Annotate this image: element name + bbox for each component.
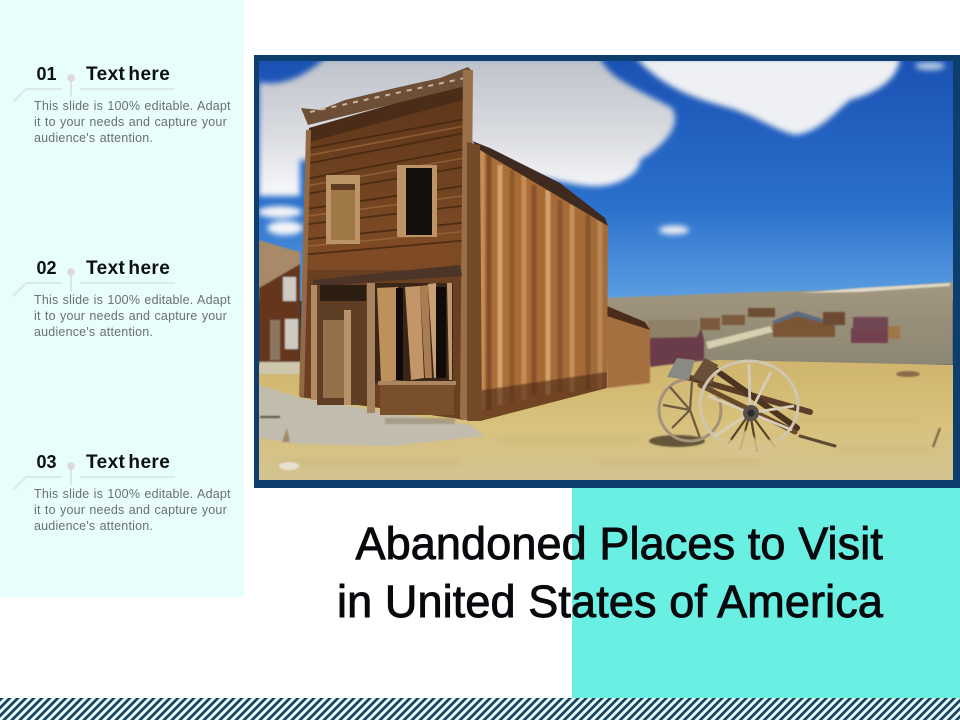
striped footer band bbox=[0, 698, 960, 720]
wagon bed bbox=[687, 366, 835, 446]
list item 02: 02 bbox=[36, 258, 57, 278]
back wheel bbox=[659, 379, 721, 441]
list item 01: This slide is 100% editable. Adapt bbox=[34, 99, 231, 113]
list item 02: audience's attention. bbox=[34, 325, 153, 339]
side wall bbox=[480, 150, 608, 420]
upper left shuttered window bbox=[331, 190, 355, 240]
list item 01: it to your needs and capture your bbox=[34, 115, 227, 129]
list item 03: audience's attention. bbox=[34, 519, 153, 533]
debris bbox=[260, 371, 940, 470]
wagon with wheels bbox=[649, 358, 835, 458]
list item 01: 01 bbox=[36, 64, 57, 84]
panel: left sidebar bbox=[0, 0, 244, 597]
list item 03: This slide is 100% editable. Adapt bbox=[34, 487, 231, 501]
roof edge bbox=[472, 141, 608, 226]
front wheel bbox=[700, 361, 798, 452]
distant buildings bbox=[648, 308, 900, 367]
list item 02: it to your needs and capture your bbox=[34, 309, 227, 323]
ground bbox=[259, 360, 953, 480]
photo: abandoned wooden building in a ghost town, in a navy frame bbox=[254, 55, 960, 488]
list item 03: 03 bbox=[36, 452, 57, 472]
list item 01: audience's attention. bbox=[34, 131, 153, 145]
title: Abandoned Places to Visit bbox=[355, 518, 883, 569]
list item 02: Text here bbox=[86, 258, 170, 279]
list item 02 bbox=[12, 258, 231, 339]
title bbox=[337, 518, 884, 627]
list item 01: Text here bbox=[86, 64, 170, 85]
clouds bbox=[258, 58, 675, 235]
hills bbox=[605, 282, 953, 365]
boarded storefront window bbox=[375, 283, 453, 383]
shed at the far side bbox=[607, 312, 650, 388]
list item 03: Text here bbox=[86, 452, 170, 473]
list item 03: it to your needs and capture your bbox=[34, 503, 227, 517]
awning bbox=[313, 265, 462, 285]
front wall bbox=[300, 82, 470, 420]
list item 03 bbox=[12, 452, 231, 533]
cornice bbox=[308, 87, 463, 142]
list item 02: This slide is 100% editable. Adapt bbox=[34, 293, 231, 307]
right corner post bbox=[460, 70, 473, 420]
frame bbox=[254, 55, 960, 488]
left background house bbox=[259, 240, 304, 374]
door bay bbox=[317, 285, 369, 405]
left corner post bbox=[299, 130, 311, 397]
sky bbox=[259, 61, 953, 301]
title: in United States of America bbox=[337, 576, 883, 627]
list item 01 bbox=[12, 64, 231, 145]
storefront base bbox=[380, 383, 454, 415]
main building bbox=[299, 67, 610, 425]
parapet boards bbox=[301, 67, 473, 125]
upper right open window bbox=[397, 165, 437, 237]
panel: teal block behind title bbox=[572, 488, 960, 698]
